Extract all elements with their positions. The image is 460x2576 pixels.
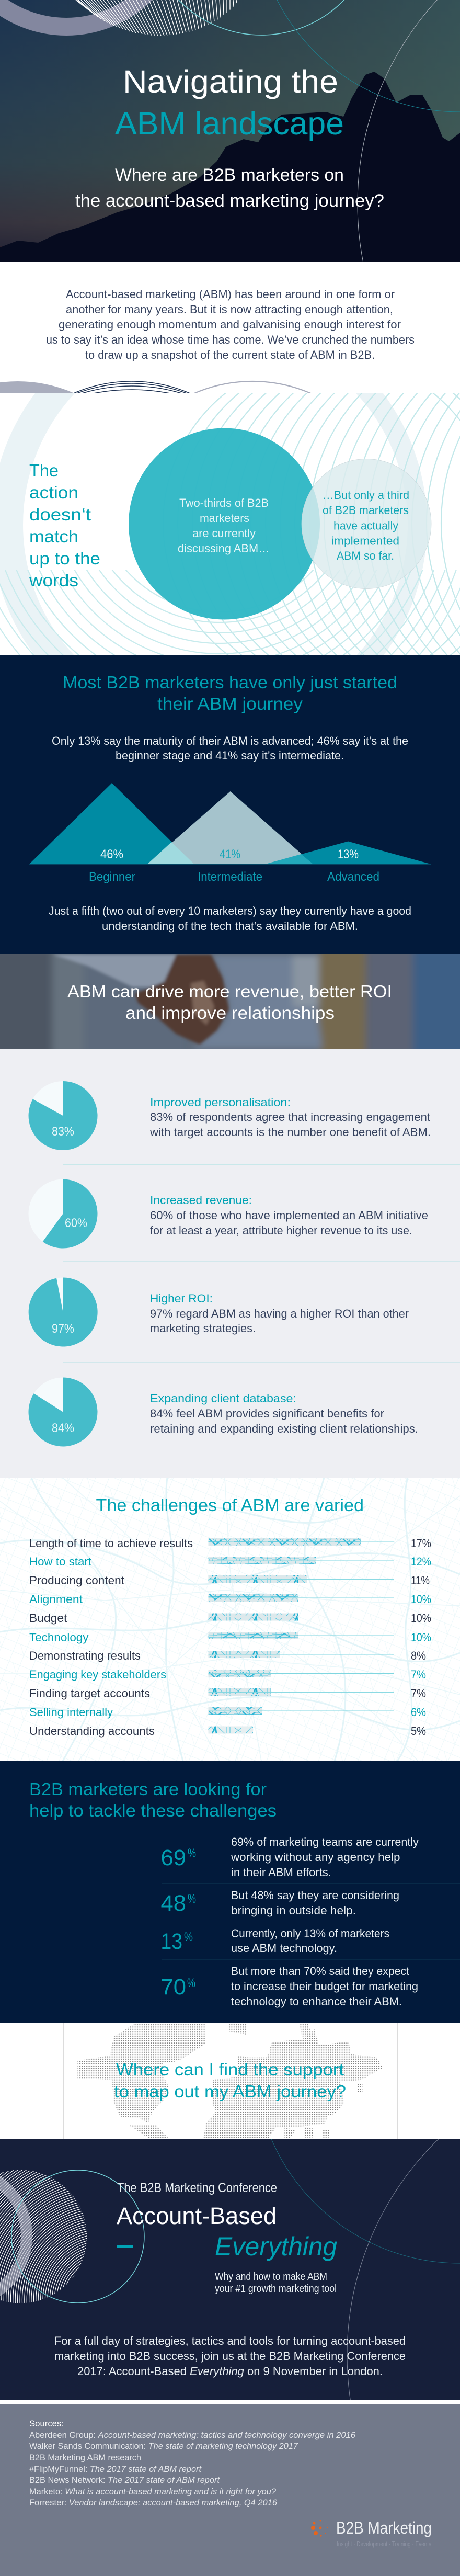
row: producing content: 11% <box>411 1574 430 1587</box>
stat: 48%: bringing in outside help. <box>231 1904 356 1917</box>
benefit: improved personalisation: 83% of respondents agree that increasing engagement <box>150 1110 431 1124</box>
row: finding target accounts: 7% <box>411 1687 426 1700</box>
row: budget <box>29 1612 431 1625</box>
circle: two-thirds: are currently <box>192 527 256 540</box>
panel: handshake photo <box>0 954 460 1049</box>
stat: 69% <box>161 1835 419 1879</box>
conference title: The B2B Marketing Conference <box>117 2181 277 2195</box>
title: ABM landscape <box>115 106 344 141</box>
hero sky background <box>0 0 460 262</box>
row: selling internally <box>29 1706 426 1719</box>
stat: 13%: use ABM technology. <box>231 1942 337 1955</box>
triangle chart: 41% <box>220 847 240 861</box>
heading: The <box>29 461 59 481</box>
stat: 13%: % <box>184 1930 193 1944</box>
logo <box>311 2518 432 2548</box>
subtitle: Where are B2B marketers on <box>115 165 344 185</box>
street map background <box>0 1478 460 1761</box>
panel: conference <box>0 2139 460 2400</box>
row: engaging key stakeholders: Engaging key stakeholders <box>29 1668 166 1681</box>
bar chart <box>29 1537 431 1738</box>
panel: sources and logo <box>0 2404 460 2576</box>
background line arcs <box>187 393 460 655</box>
benefit: higher ROI: marketing strategies. <box>150 1322 256 1335</box>
stat: 70%: technology to enhance their ABM. <box>231 1995 402 2008</box>
triangle chart: Advanced <box>327 870 380 884</box>
text: maturity <box>52 734 408 762</box>
panel: the action doesn't match up to the words <box>0 393 460 655</box>
sources list: Walker Sands Communication: The state of marketing technology 2017 <box>29 2441 298 2451</box>
heading: match <box>29 527 78 547</box>
benefit: increased revenue: Increased revenue: <box>150 1194 252 1207</box>
row: budget: 10% <box>411 1612 431 1625</box>
row: engaging key stakeholders: 7% <box>411 1668 426 1681</box>
conference description <box>54 2334 406 2378</box>
row: producing content <box>29 1574 430 1587</box>
stat: 48%: % <box>188 1892 196 1906</box>
stat: 48%: But 48% say they are considering <box>231 1889 399 1902</box>
benefit: improved personalisation: Improved personalisation: <box>150 1096 291 1109</box>
conference description: For a full day of strategies, tactics and tools for turning account-based <box>54 2334 406 2347</box>
stat: 13% <box>161 1927 389 1955</box>
benefit: increased revenue: 60% of those who have implemented an ABM initiative <box>150 1209 428 1222</box>
panel: where can I find support <box>0 2023 460 2139</box>
sources list <box>29 2419 356 2507</box>
stat: 69%: 69% of marketing teams are currently <box>231 1835 419 1848</box>
circle: a third: of B2B marketers <box>323 504 409 517</box>
logo: Insight · Development · Training · Events <box>337 2540 431 2548</box>
text: maturity: Only 13% say the maturity of their ABM is advanced; 46% say it’s at the <box>52 734 408 747</box>
logo: B2B Marketing <box>336 2518 432 2537</box>
decorative circles <box>0 0 460 262</box>
row: understanding accounts: Understanding accounts <box>29 1724 155 1738</box>
row: how to start: How to start <box>29 1555 92 1568</box>
decorative cut-off circles strip <box>0 381 310 393</box>
benefit: expanding client database: 84% <box>52 1421 74 1435</box>
triangle chart: Beginner <box>89 870 135 884</box>
benefit: higher ROI: 97% regard ABM as having a higher ROI than other <box>150 1307 409 1320</box>
stat: 13%: 13 <box>161 1929 182 1954</box>
benefit: improved personalisation: with target accounts is the number one benefit of ABM. <box>150 1126 431 1139</box>
heading: help to tackle these challenges <box>29 1801 277 1821</box>
conference title <box>117 2181 337 2295</box>
heading <box>67 982 392 1023</box>
circle: two-thirds: Two-thirds of B2B <box>179 496 269 509</box>
row: understanding accounts: 5% <box>411 1724 426 1738</box>
heading: Most B2B marketers have only just started <box>63 673 397 693</box>
text: tech understanding: Just a fifth (two out of every 10 marketers) say they currently have a good <box>49 904 411 917</box>
sources list: Sources: <box>29 2419 64 2429</box>
row: how to start: 12% <box>411 1555 431 1568</box>
circle: two-thirds <box>129 428 320 619</box>
stat: 69%: in their ABM efforts. <box>231 1866 331 1879</box>
circle: two-thirds: marketers <box>200 512 249 525</box>
panel: looking for help <box>0 1761 460 2023</box>
benefit: improved personalisation: 83% <box>52 1125 74 1139</box>
triangle chart: 13% <box>338 847 359 861</box>
circle: a third: implemented <box>331 535 399 547</box>
stat: 48% <box>161 1889 399 1917</box>
conference title: Everything <box>215 2232 337 2261</box>
heading <box>29 1780 277 1821</box>
stat: 70%: % <box>187 1976 196 1990</box>
row: alignment <box>29 1593 431 1606</box>
row: technology <box>29 1631 431 1644</box>
row: selling internally: Selling internally <box>29 1706 113 1719</box>
heading: The challenges of ABM are varied <box>96 1496 364 1515</box>
benefit: expanding client database: retaining and expanding existing client relationships. <box>150 1422 418 1435</box>
panel: hero <box>0 0 460 262</box>
stat: 69%: working without any agency help <box>231 1851 400 1864</box>
triangle chart: Intermediate <box>198 870 262 884</box>
text: tech understanding <box>49 904 411 933</box>
conference description: 2017: Account-Based Everything on 9 November in London. <box>77 2365 383 2378</box>
benefit: higher ROI: Higher ROI: <box>150 1292 213 1305</box>
benefit: expanding client database: 84% feel ABM provides significant benefits for <box>150 1407 384 1420</box>
dotted world map <box>78 2023 383 2139</box>
row: demonstrating results: 8% <box>411 1649 426 1662</box>
text: maturity: beginner stage and 41% say it’s intermediate. <box>116 749 344 762</box>
triangle chart: 46% <box>100 847 123 861</box>
background ring <box>0 393 426 655</box>
sources list: B2B Marketing ABM research <box>29 2453 141 2462</box>
row: technology: 10% <box>411 1631 431 1644</box>
stat: 69%: % <box>188 1846 196 1860</box>
white background <box>0 2023 460 2139</box>
circle: a third: have actually <box>334 519 399 532</box>
handshake photo backdrop <box>0 954 460 1049</box>
row: demonstrating results <box>29 1649 426 1662</box>
heading: ABM can drive more revenue, better ROI <box>67 982 392 1002</box>
benefit: increased revenue: for at least a year, attribute higher revenue to its use. <box>150 1224 412 1237</box>
panel: challenges <box>0 1478 460 1761</box>
sources list: Marketo: What is account-based marketing and is it right for you? <box>29 2487 277 2496</box>
row: alignment: Alignment <box>29 1593 83 1606</box>
navy background <box>0 655 460 954</box>
intro text: generating enough momentum and galvanising enough interest for <box>59 318 401 331</box>
panel: ABM maturity <box>0 655 460 954</box>
heading: words <box>29 571 78 591</box>
row: understanding accounts <box>29 1724 426 1738</box>
grey background <box>0 2404 460 2576</box>
heading: Where can I find the support <box>116 2060 344 2080</box>
benefit: increased revenue <box>28 1179 428 1249</box>
stat: 70%: to increase their budget for marketing <box>231 1980 418 1993</box>
row: length of time <box>29 1537 431 1550</box>
row: finding target accounts: Finding target accounts <box>29 1687 150 1700</box>
benefit: expanding client database: Expanding client database: <box>150 1392 296 1405</box>
intro text <box>46 288 415 361</box>
circle: a third: ABM so far. <box>337 549 394 562</box>
text: tech understanding: understanding of the tech that’s available for ABM. <box>102 920 358 933</box>
subtitle <box>75 165 384 211</box>
title: Navigating the <box>123 64 338 99</box>
title <box>115 64 344 141</box>
row: technology: Technology <box>29 1631 89 1644</box>
pale grey background <box>0 1049 460 1478</box>
intro text: to draw up a snapshot of the current state of ABM in B2B. <box>85 348 375 361</box>
conference description: marketing into B2B success, join us at the B2B Marketing Conference <box>54 2350 406 2363</box>
heading <box>29 461 100 591</box>
row: length of time: 17% <box>411 1537 431 1550</box>
subtitle: the account-based marketing journey? <box>75 191 384 211</box>
row: budget: Budget <box>29 1612 67 1625</box>
sources list: Aberdeen Group: Account-based marketing: tactics and technology converge in 2016 <box>29 2430 356 2440</box>
circle: a third: …But only a third <box>323 489 409 502</box>
heading: to map out my ABM journey? <box>114 2082 346 2102</box>
sources list: #FlipMyFunnel: The 2017 state of ABM report <box>29 2464 202 2474</box>
heading: up to the <box>29 549 100 569</box>
triangle chart <box>29 783 431 884</box>
stat: 48%: 48 <box>161 1891 186 1916</box>
row: selling internally: 6% <box>411 1706 426 1719</box>
mountain silhouette <box>0 72 460 262</box>
heading: B2B marketers are looking for <box>29 1780 267 1799</box>
conference title: Account-Based <box>117 2203 277 2229</box>
heading <box>114 2060 346 2102</box>
benefit: expanding client database <box>28 1378 418 1447</box>
heading: action <box>29 483 78 503</box>
row: length of time: Length of time to achieve results <box>29 1537 193 1550</box>
conference title: Why and how to make ABM <box>215 2271 327 2283</box>
sources list: Forrester: Vendor landscape: account-based marketing, Q4 2016 <box>29 2498 278 2507</box>
row: how to start <box>29 1555 431 1568</box>
stat: 70%: But more than 70% said they expect <box>231 1965 410 1978</box>
row: producing content: Producing content <box>29 1574 125 1587</box>
benefit: higher ROI <box>28 1277 409 1346</box>
heading: and improve relationships <box>125 1004 335 1023</box>
benefit: higher ROI: 97% <box>52 1322 74 1336</box>
stat: 70%: 70 <box>161 1974 186 2000</box>
panel: benefits <box>0 1049 460 1478</box>
circle: a third <box>302 459 431 589</box>
benefit: increased revenue: 60% <box>65 1216 87 1230</box>
row: alignment: 10% <box>411 1593 431 1606</box>
stat: 70% <box>161 1965 418 2008</box>
conference title: your #1 growth marketing tool <box>215 2283 337 2295</box>
sources list: B2B News Network: The 2017 state of ABM report <box>29 2475 220 2485</box>
row: finding target accounts <box>29 1687 426 1700</box>
row: engaging key stakeholders <box>29 1668 426 1681</box>
heading: their ABM journey <box>157 695 303 714</box>
decorative circles <box>0 2139 460 2400</box>
benefit: improved personalisation <box>28 1081 431 1150</box>
intro text: us to say it’s an idea whose time has come. We’ve crunched the numbers <box>46 333 415 346</box>
row: demonstrating results: Demonstrating results <box>29 1649 141 1662</box>
stat: 13%: Currently, only 13% of marketers <box>231 1927 389 1940</box>
circle: two-thirds: discussing ABM… <box>178 542 270 555</box>
navy background <box>0 1761 460 2023</box>
navy background <box>0 2139 460 2400</box>
stat: 69%: 69 <box>161 1845 186 1870</box>
intro text: another for many years. But it is now attracting enough attention, <box>66 303 393 316</box>
intro text: Account-based marketing (ABM) has been around in one form or <box>66 288 395 301</box>
heading <box>63 673 397 714</box>
heading: doesn‘t <box>29 505 91 525</box>
